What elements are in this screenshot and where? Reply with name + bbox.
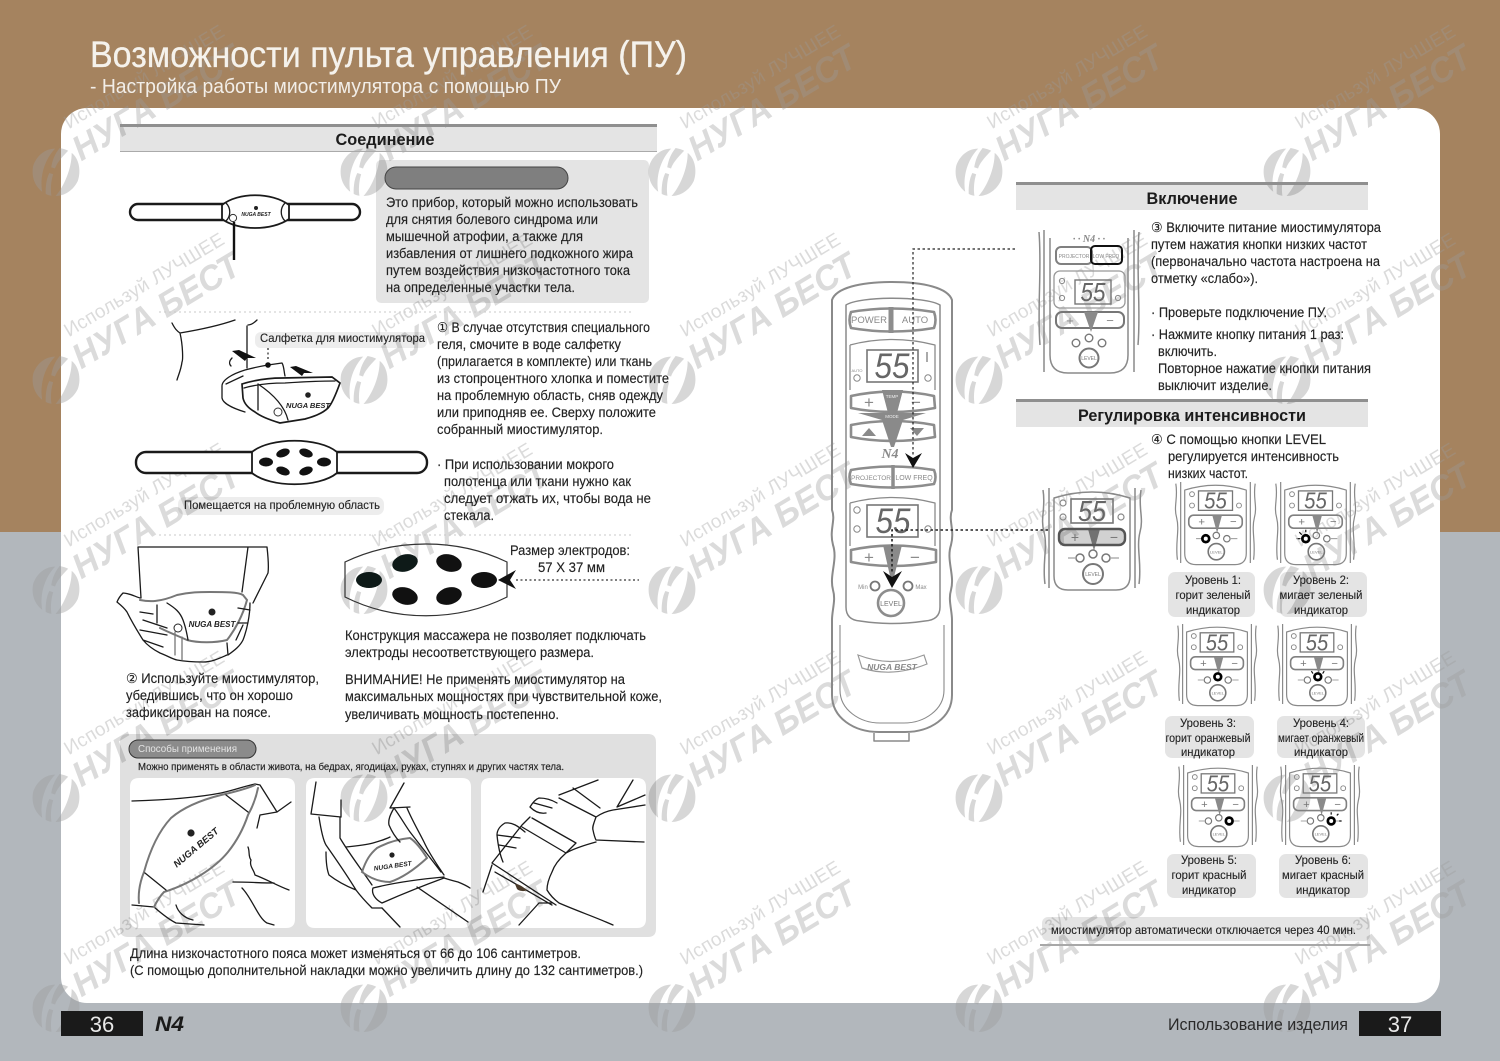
- label: level 4: [1277, 716, 1365, 759]
- diagram: electrode layout: [345, 544, 639, 616]
- buttons: power and auto: [850, 307, 936, 333]
- text: warning: увеличивать мощность постепенно.: [345, 707, 559, 722]
- illustration: remote detail low freq: LOW FREQ: [1093, 254, 1119, 260]
- text: step 1: [437, 320, 669, 437]
- level 2 indicator: [1275, 482, 1367, 617]
- watermarks: Используй ЛУЧШЕЕ: [61, 21, 228, 134]
- text: wet towel note: следует отжать их, чтобы вода не: [444, 491, 651, 506]
- buttons: temperature and mode: +: [864, 393, 874, 412]
- text: electrode design note: электроды несоответствующего размера.: [345, 645, 594, 660]
- watermarks: НУГА БЕСТ: [988, 662, 1172, 794]
- heading: power on: [1016, 182, 1368, 210]
- footer: left page number: [61, 1011, 143, 1037]
- text: power instructions: Повторное нажатие кнопки питания: [1158, 361, 1371, 376]
- text: step 3: [1151, 220, 1381, 286]
- label: level 5: [1167, 853, 1256, 898]
- illustration: remote detail level: [1043, 488, 1141, 590]
- watermarks: НУГА БЕСТ: [65, 454, 249, 586]
- brand plate: [858, 655, 927, 672]
- divider: [159, 311, 633, 313]
- buttons: power and auto: AUTO: [902, 315, 928, 326]
- label: level 2: [1280, 572, 1367, 617]
- watermarks: НУГА БЕСТ: [1296, 662, 1480, 794]
- buttons: projector and low freq: [850, 465, 936, 489]
- text: step 1: из стопроцентного хлопка и поместите: [437, 371, 669, 386]
- watermarks: Используй ЛУЧШЕЕ: [984, 21, 1151, 134]
- level 3 indicator: [1165, 624, 1257, 759]
- label: level 6: Уровень 6:: [1295, 853, 1351, 867]
- watermarks: Используй ЛУЧШЕЕ: [369, 21, 536, 134]
- remote: level 1: −: [1230, 517, 1237, 529]
- remote: level 2: 55: [1304, 488, 1328, 514]
- text: step 3: путем нажатия кнопки низких частот: [1151, 237, 1367, 252]
- remote: level 5: +: [1201, 799, 1208, 811]
- label: level 4: Уровень 4:: [1293, 716, 1349, 730]
- remote: level 3: 55: [1206, 629, 1228, 655]
- buttons: temperature and mode: [851, 390, 935, 447]
- label: level 2: мигает зеленый: [1280, 588, 1362, 602]
- illustration: belt on waist with hands: NUGA BEST: [189, 620, 237, 629]
- watermarks: НУГА БЕСТ: [1296, 872, 1480, 1004]
- note: auto off: [1040, 917, 1370, 946]
- illustration: remote detail level: −: [1110, 529, 1118, 545]
- watermarks: Используй ЛУЧШЕЕ: [369, 439, 536, 552]
- text: step 4: ④ С помощью кнопки LEVEL: [1151, 432, 1326, 447]
- label: level 5: Уровень 5:: [1181, 853, 1237, 867]
- watermarks: НУГА БЕСТ: [988, 454, 1172, 586]
- label: level 6: индикатор: [1296, 883, 1350, 897]
- text: step 4: [1151, 432, 1339, 481]
- remote: level 1: LEVEL: [1210, 549, 1223, 554]
- display: upper: AUTO: [851, 368, 863, 373]
- card: arm or buttock: [483, 780, 645, 925]
- remote: level 5: LEVEL: [1213, 831, 1226, 836]
- remote: level 5: 55: [1207, 770, 1229, 796]
- remote: level 4: +: [1300, 658, 1307, 670]
- buttons: plus minus: +: [864, 548, 874, 567]
- display: lower: [850, 498, 935, 546]
- level 5 indicator: [1167, 765, 1258, 898]
- badge: usage methods: Способы применения: [138, 743, 237, 755]
- button: level with indicators: [858, 582, 927, 616]
- watermarks: Используй ЛУЧШЕЕ: [1292, 21, 1459, 134]
- text: step 1: собранный миостимулятор.: [437, 422, 603, 437]
- card: thigh: [311, 782, 470, 927]
- watermarks: НУГА БЕСТ: [373, 36, 557, 168]
- panel: usage methods: [120, 734, 656, 937]
- background: grey bottom: [0, 532, 1500, 1061]
- icon: belt underside with electrodes: [136, 441, 427, 484]
- model mark N4: N4: [880, 447, 899, 462]
- buttons: plus minus: −: [910, 548, 920, 567]
- display: lower: 55: [876, 502, 911, 541]
- watermarks: НУГА БЕСТ: [65, 662, 249, 794]
- text: step 1: на проблемную область, сняв одежду: [437, 388, 663, 403]
- heading: power on: Включение: [1146, 189, 1238, 208]
- buttons: projector and low freq: LOW FREQ: [895, 475, 933, 482]
- watermarks: Используй ЛУЧШЕЕ: [677, 21, 844, 134]
- watermarks: Используй ЛУЧШЕЕ: [677, 229, 844, 342]
- watermarks: НУГА БЕСТ: [1296, 36, 1480, 168]
- label: level 3: индикатор: [1181, 745, 1235, 759]
- buttons: temperature and mode: MODE: [885, 414, 899, 419]
- card: abdomen: [132, 784, 291, 925]
- watermarks: НУГА БЕСТ: [988, 872, 1172, 1004]
- illustration: remote detail low freq: −: [1106, 313, 1114, 328]
- illustration: remote control: [832, 282, 952, 741]
- remote: level 6: 55: [1309, 770, 1331, 796]
- watermarks: НУГА БЕСТ: [681, 662, 865, 794]
- panel: connection section: [117, 124, 669, 978]
- text: belt length: [130, 946, 643, 978]
- white content panel: [61, 108, 1440, 1003]
- label: level 3: горит оранжевый: [1166, 731, 1250, 745]
- label: level 5: горит красный: [1172, 868, 1246, 882]
- watermarks: НУГА БЕСТ: [373, 872, 557, 1004]
- remote: level 1: +: [1198, 517, 1205, 529]
- label: level 5: индикатор: [1182, 883, 1236, 897]
- text: step 3: отметку «слабо»).: [1151, 271, 1258, 286]
- watermarks: НУГА БЕСТ: [373, 662, 557, 794]
- watermarks: Используй ЛУЧШЕЕ: [984, 439, 1151, 552]
- label: level 4: мигает оранжевый: [1278, 731, 1364, 745]
- illustration: remote detail low freq: LEVEL: [1081, 356, 1097, 362]
- text: power instructions: [1151, 305, 1371, 393]
- remote: level 4: [1277, 624, 1357, 706]
- watermarks: Используй ЛУЧШЕЕ: [369, 647, 536, 760]
- watermarks: Используй ЛУЧШЕЕ: [677, 647, 844, 760]
- text: step 1: ① В случае отсутствия специального: [437, 320, 650, 335]
- level 1 indicator: [1168, 482, 1256, 617]
- label: level 2: Уровень 2:: [1293, 573, 1349, 587]
- text: step 2: зафиксирован на поясе.: [126, 705, 271, 720]
- remote: level 2: −: [1330, 517, 1337, 529]
- watermarks: НУГА БЕСТ: [681, 36, 865, 168]
- note: auto off: миостимулятор автоматически отключается через 40 мин.: [1051, 923, 1356, 937]
- watermarks: НУГА БЕСТ: [681, 244, 865, 376]
- label: level 1: [1168, 572, 1255, 617]
- watermarks: Используй ЛУЧШЕЕ: [1292, 439, 1459, 552]
- remote: level 6: −: [1334, 799, 1341, 811]
- label: level 2: индикатор: [1294, 603, 1348, 617]
- remote: level 4: 55: [1306, 629, 1328, 655]
- remote: level 2: LEVEL: [1310, 549, 1323, 554]
- divider: [159, 534, 633, 536]
- illustration: belt on waist with hands: [117, 547, 268, 662]
- remote: level 6: +: [1303, 799, 1310, 811]
- arrow: to level button: [883, 530, 1048, 588]
- card: thigh: NUGA BEST: [373, 860, 413, 873]
- footer: section name: Использование изделия: [1168, 1016, 1348, 1034]
- watermarks: Используй ЛУЧШЕЕ: [1292, 229, 1459, 342]
- text: power instructions: выключит изделие.: [1158, 378, 1272, 393]
- button: level with indicators: Max: [915, 585, 927, 591]
- label: level 1: Уровень 1:: [1185, 573, 1241, 587]
- label: level 4: индикатор: [1294, 745, 1348, 759]
- footer: right page number: 37: [1388, 1012, 1412, 1037]
- icon: belt with wire: NUGA BEST: [241, 212, 272, 218]
- text: step 2: убедившись, что он хорошо: [126, 688, 293, 703]
- remote: level 1: 55: [1204, 488, 1228, 514]
- text: warning: максимальных мощностях при чувствительной коже,: [345, 689, 662, 704]
- watermarks: Используй ЛУЧШЕЕ: [1292, 857, 1459, 970]
- icon: belt with wire: [130, 195, 360, 260]
- heading: connection: [120, 124, 657, 152]
- label: placed on problem area: Помещается на проблемную область: [184, 498, 380, 512]
- text: usage description: Можно применять в области живота, на бедрах, ягодицах, руках, ступнях и других частях тела.: [138, 761, 564, 773]
- buttons: temperature and mode: TEMP: [886, 394, 898, 399]
- callout: device description: для снятия болевого синдрома или: [386, 212, 598, 227]
- text: electrode design note: [345, 628, 646, 660]
- remote: level 6: LEVEL: [1315, 831, 1328, 836]
- text: wet towel note: полотенца или ткани нужно как: [444, 474, 631, 489]
- display: upper: 55: [874, 347, 910, 386]
- watermarks: НУГА БЕСТ: [1296, 454, 1480, 586]
- remote: level 5: [1178, 765, 1258, 847]
- footer: model mark: N4: [155, 1013, 184, 1036]
- text: belt length: (С помощью дополнительной накладки можно увеличить длину до 132 сантиметров.): [130, 963, 643, 978]
- heading: connection: Соединение: [336, 130, 434, 149]
- card: abdomen: NUGA BEST: [172, 825, 222, 870]
- callout: device description: на определенные участки тела.: [386, 280, 575, 295]
- illustration: remote detail low freq: +: [1066, 313, 1074, 328]
- remote: level 2: [1275, 482, 1356, 565]
- text: warning: [345, 672, 662, 722]
- illustration: remote detail low freq: [1039, 230, 1139, 373]
- text: step 3: ③ Включите питание миостимулятора: [1151, 220, 1381, 235]
- label: level 1: горит зеленый: [1176, 588, 1250, 602]
- watermarks: НУГА БЕСТ: [65, 244, 249, 376]
- watermarks: Используй ЛУЧШЕЕ: [61, 857, 228, 970]
- title: Возможности пульта управления (ПУ): [90, 34, 687, 75]
- illustration: remote detail level: +: [1071, 529, 1079, 545]
- text: electrode size: Размер электродов:: [510, 543, 630, 558]
- label: wipe: Салфетка для миостимулятора: [260, 331, 425, 345]
- text: step 1: (прилагается в комплекте) или ткань: [437, 354, 652, 369]
- callout: device description: [376, 160, 649, 303]
- illustration: remote detail low freq: PROJECTOR: [1059, 254, 1090, 260]
- illustration: remote detail low freq: · · N4 · ·: [1073, 234, 1106, 245]
- text: electrode design note: Конструкция массажера не позволяет подключать: [345, 628, 646, 643]
- label: level 3: [1165, 716, 1254, 759]
- text: power instructions: · Нажмите кнопку питания 1 раз:: [1151, 327, 1344, 342]
- text: warning: ВНИМАНИЕ! Не применять миостимулятор на: [345, 672, 625, 687]
- callout: device description: путем воздействия низкочастотного тока: [386, 263, 630, 278]
- footer: left page number: 36: [90, 1012, 114, 1037]
- text: power instructions: включить.: [1158, 344, 1217, 359]
- background: brown top: [0, 0, 1500, 532]
- watermarks: Используй ЛУЧШЕЕ: [369, 857, 536, 970]
- heading: intensity adjustment: Регулировка интенсивности: [1078, 406, 1306, 425]
- text: step 2: [126, 671, 319, 720]
- label: level 6: [1279, 853, 1368, 898]
- footer: right page number: [1359, 1011, 1441, 1037]
- watermarks: НУГА БЕСТ: [373, 244, 557, 376]
- buttons: projector and low freq: PROJECTOR: [851, 475, 891, 482]
- level 4 indicator: [1277, 624, 1365, 759]
- watermarks: Используй ЛУЧШЕЕ: [984, 647, 1151, 760]
- button: level with indicators: Min: [858, 585, 868, 591]
- heading: intensity adjustment: [1016, 399, 1368, 427]
- callout: device description: избавления от лишнего подкожного жира: [386, 246, 633, 261]
- level 6 indicator: [1279, 765, 1368, 898]
- text: step 2: ② Используйте миостимулятор,: [126, 671, 319, 686]
- illustration: remote detail level: LEVEL: [1085, 572, 1101, 578]
- text: step 1: геля, смочите в воде салфетку: [437, 337, 621, 352]
- watermarks: Используй ЛУЧШЕЕ: [61, 229, 228, 342]
- watermarks: Используй ЛУЧШЕЕ: [984, 229, 1151, 342]
- watermarks: НУГА БЕСТ: [65, 872, 249, 1004]
- subtitle: - Настройка работы миостимулятора с помощью ПУ: [90, 76, 561, 98]
- watermarks: Используй ЛУЧШЕЕ: [61, 439, 228, 552]
- text: step 1: или приподняв ее. Сверху положите: [437, 405, 656, 420]
- watermarks: НУГА БЕСТ: [988, 244, 1172, 376]
- watermarks: НУГА БЕСТ: [373, 454, 557, 586]
- watermarks: НУГА БЕСТ: [65, 36, 249, 168]
- watermarks: НУГА БЕСТ: [681, 454, 865, 586]
- watermarks: Используй ЛУЧШЕЕ: [61, 647, 228, 760]
- remote: level 4: −: [1331, 658, 1338, 670]
- remote: level 1: [1175, 482, 1256, 565]
- text: step 3: (первоначально частота настроена на: [1151, 254, 1380, 269]
- remote: level 6: [1280, 765, 1360, 847]
- callout: device description: мышечной атрофии, а также для: [386, 229, 583, 244]
- label: level 6: мигает красный: [1282, 868, 1364, 882]
- watermarks: Используй ЛУЧШЕЕ: [369, 229, 536, 342]
- display: upper: [850, 340, 935, 390]
- watermarks: НУГА БЕСТ: [988, 36, 1172, 168]
- watermarks: Используй ЛУЧШЕЕ: [1292, 647, 1459, 760]
- badge: usage methods: [129, 740, 256, 758]
- button: level with indicators: LEVEL: [880, 601, 902, 608]
- remote: level 3: LEVEL: [1212, 690, 1225, 695]
- buttons: temperature and mode: −: [911, 393, 921, 412]
- callout: device description: Это прибор, который можно использовать: [386, 195, 638, 210]
- remote: level 3: −: [1231, 658, 1238, 670]
- illustration: remote detail level: 55: [1078, 496, 1107, 528]
- text: electrode size: [510, 543, 630, 575]
- text: step 4: регулируется интенсивность: [1168, 449, 1339, 464]
- illustration: remote detail low freq: 55: [1080, 277, 1106, 307]
- text: step 4: низких частот.: [1168, 466, 1248, 481]
- arrow: to low freq button: [905, 249, 1015, 468]
- icon: belt placed on skin: [172, 320, 340, 423]
- remote: level 3: [1177, 624, 1257, 706]
- remote: level 5: −: [1232, 799, 1239, 811]
- remote: level 4: LEVEL: [1312, 690, 1325, 695]
- text: wet towel note: стекала.: [444, 508, 494, 523]
- buttons: plus minus: [851, 545, 936, 585]
- remote: level 2: +: [1298, 517, 1305, 529]
- icon: belt placed on skin: NUGA BEST: [286, 401, 331, 410]
- watermarks: Используй ЛУЧШЕЕ: [677, 439, 844, 552]
- buttons: power and auto: POWER: [851, 315, 887, 326]
- watermarks: Используй ЛУЧШЕЕ: [677, 857, 844, 970]
- brand plate: NUGA BEST: [867, 662, 918, 672]
- label: level 3: Уровень 3:: [1180, 716, 1236, 730]
- text: wet towel note: [437, 457, 651, 523]
- text: electrode size: 57 X 37 мм: [538, 560, 605, 575]
- text: wet towel note: · При использовании мокрого: [437, 457, 614, 472]
- watermarks: НУГА БЕСТ: [681, 872, 865, 1004]
- label: level 1: индикатор: [1186, 603, 1240, 617]
- text: belt length: Длина низкочастотного пояса может изменяться от 66 до 106 сантиметров.: [130, 946, 581, 961]
- remote: level 3: +: [1200, 658, 1207, 670]
- watermarks: НУГА БЕСТ: [1296, 244, 1480, 376]
- text: power instructions: · Проверьте подключение ПУ.: [1151, 305, 1327, 320]
- watermarks: Используй ЛУЧШЕЕ: [984, 857, 1151, 970]
